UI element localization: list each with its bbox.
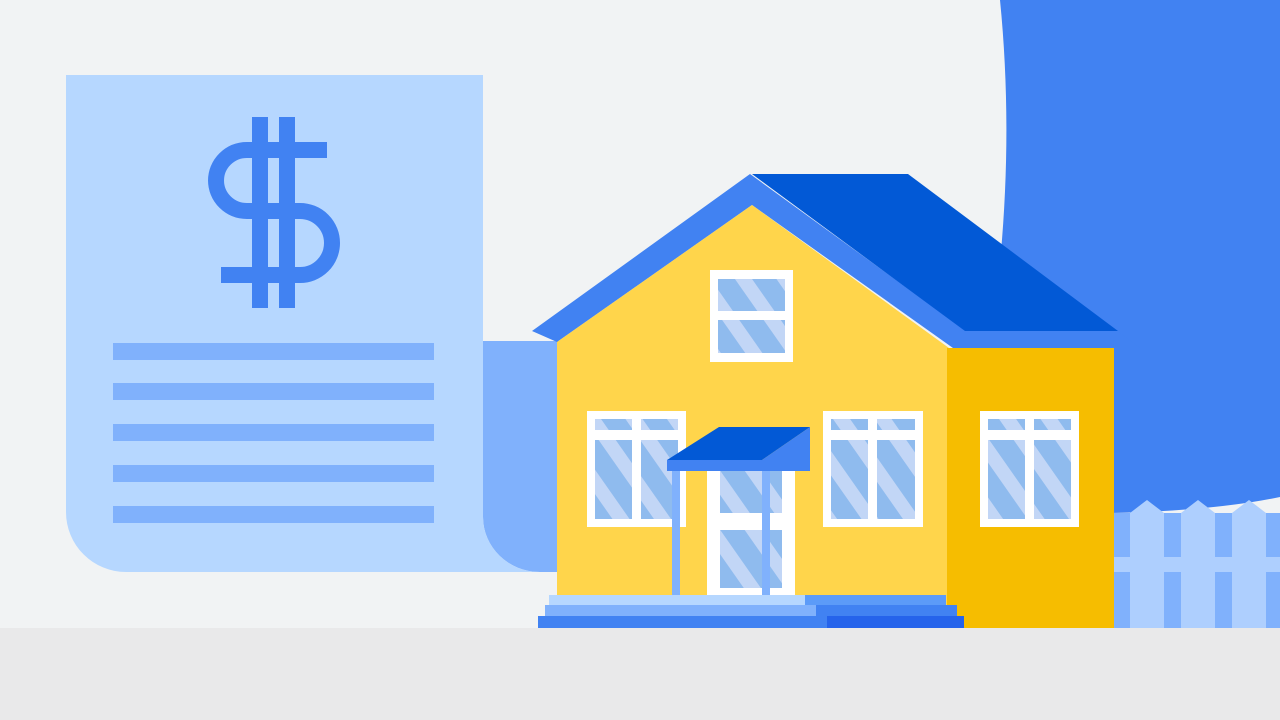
porch pillars bbox=[672, 471, 770, 595]
document curl bbox=[483, 341, 600, 572]
gable window bbox=[710, 270, 793, 362]
document bbox=[66, 75, 600, 572]
porch roof bbox=[667, 427, 810, 471]
left window bbox=[587, 411, 686, 527]
document text lines bbox=[113, 343, 434, 523]
steps bbox=[538, 595, 964, 628]
document sheet bbox=[66, 75, 540, 572]
front wall bbox=[557, 205, 949, 628]
middle window bbox=[823, 411, 923, 527]
roof dark bbox=[752, 174, 1118, 331]
side wall bbox=[947, 348, 1114, 628]
door bbox=[707, 465, 795, 595]
house bbox=[532, 174, 1140, 628]
ground band bbox=[0, 628, 1280, 720]
fence bbox=[1113, 500, 1280, 628]
icon: dollar sign bbox=[216, 117, 332, 308]
roof edge band bbox=[532, 174, 1140, 348]
side window bbox=[980, 411, 1079, 527]
blue background shape bbox=[996, 0, 1280, 513]
